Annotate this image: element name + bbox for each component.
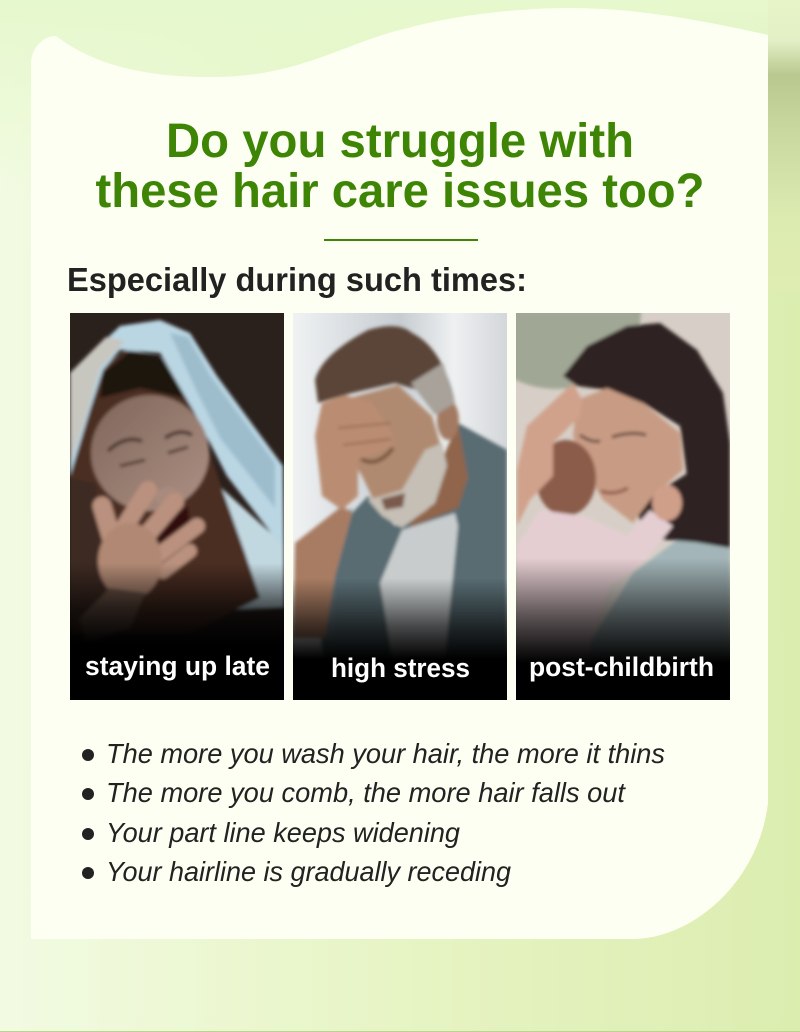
symptom list: Your hairline is gradually receding	[106, 856, 511, 887]
symptom list: The more you wash your hair, the more it thins	[106, 738, 665, 769]
label: high stress: high stress	[331, 653, 470, 683]
panel: post-childbirth photo	[516, 313, 730, 700]
label: post-childbirth: post-childbirth	[529, 652, 714, 682]
title: Do you struggle with	[166, 115, 634, 168]
subheading: Especially during such times:	[67, 261, 527, 298]
panel: staying up late photo	[70, 313, 284, 700]
label: staying up late: staying up late	[85, 651, 270, 681]
symptom list: Your part line keeps widening	[106, 817, 460, 848]
symptom list: The more you comb, the more hair falls out	[106, 777, 626, 808]
title	[96, 115, 704, 218]
panel: high stress photo	[293, 313, 507, 700]
title: these hair care issues too?	[96, 165, 704, 218]
title divider	[324, 239, 478, 241]
symptom list	[82, 738, 665, 887]
